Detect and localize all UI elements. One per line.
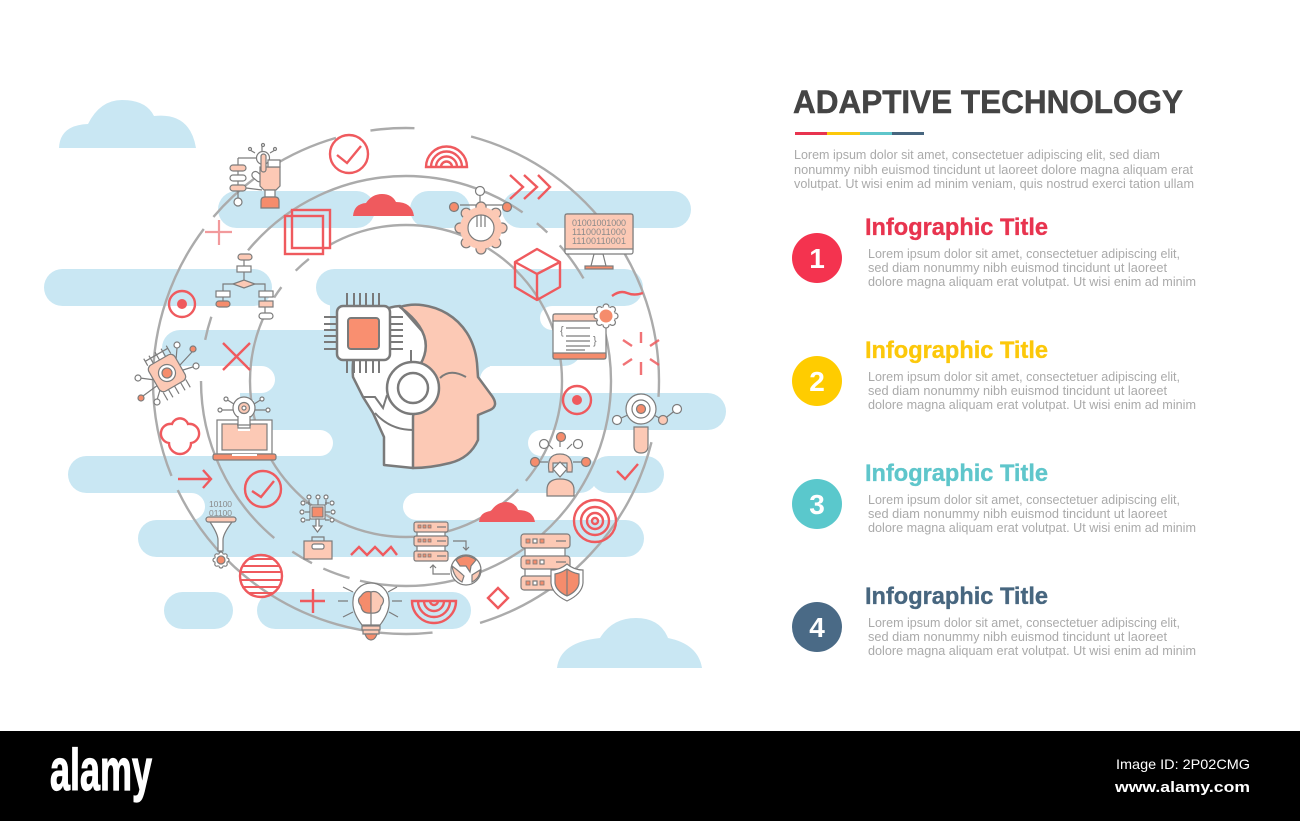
item 3 text	[868, 492, 1196, 535]
icon: code window with gear	[553, 304, 618, 359]
icon: triple chevrons	[510, 175, 550, 199]
item 4 text: dolore magna aliquam erat volutpat. Ut wisi enim ad minim	[868, 643, 1196, 658]
icon: cross	[223, 343, 250, 370]
item 4 text	[868, 615, 1196, 658]
icon: servers with globe	[414, 522, 481, 585]
icon: magnifier with nodes	[612, 394, 682, 453]
icon: overlapping squares	[285, 210, 330, 254]
intro text: Lorem ipsum dolor sit amet, consectetuer adipiscing elit, sed diam	[794, 147, 1160, 162]
icon: inverted rainbow arcs	[412, 601, 456, 623]
badge 1	[792, 233, 842, 283]
item 1 text: Lorem ipsum dolor sit amet, consectetuer adipiscing elit,	[868, 246, 1180, 261]
watermark logo: alamy	[50, 738, 152, 803]
icon: diamond	[488, 588, 508, 608]
icon: binary monitor: 11100110001	[572, 236, 626, 246]
icon: laptop with bulb	[213, 397, 276, 460]
icon: funnel with data: 01100	[209, 508, 232, 518]
concentric dashed rings	[153, 128, 659, 634]
item 1 heading: Infographic Title	[865, 214, 1048, 241]
icon: check circle	[330, 135, 368, 173]
item 1 text	[868, 246, 1196, 289]
badge 4: 4	[809, 612, 825, 643]
icon: arrow	[178, 470, 211, 488]
icon: concentric target	[574, 500, 616, 542]
icon: chip to briefcase	[300, 495, 335, 559]
item 2 text: dolore magna aliquam erat volutpat. Ut wisi enim ad minim	[868, 397, 1196, 412]
footer bar	[0, 731, 1300, 821]
item 4 heading: Infographic Title	[865, 583, 1048, 610]
icon: target right	[563, 386, 591, 414]
icon: red cloud lower	[479, 502, 535, 522]
icon: binary monitor: 11100011000	[572, 227, 626, 237]
icon: plus	[300, 589, 325, 613]
icon: hand pressing button with flow	[230, 144, 280, 208]
item 2	[792, 337, 1196, 412]
icon: small chip rotated	[135, 342, 199, 405]
icon: gear with nodes	[450, 186, 512, 254]
item 1	[792, 214, 1196, 289]
icon: flowchart	[216, 254, 273, 319]
badge 2	[792, 356, 842, 406]
intro text	[794, 147, 1194, 191]
icon: check circle lower	[245, 471, 281, 507]
badge 1: 1	[809, 243, 825, 274]
icon: light bulb with brain	[338, 583, 402, 640]
item 2 text: sed diam nonummy nibh euismod tincidunt ut laoreet	[868, 383, 1167, 398]
icon: clover	[161, 418, 199, 454]
icon: code window with gear: {	[560, 325, 564, 337]
icon: code window with gear: }	[593, 335, 597, 347]
icon: striped circle	[240, 555, 282, 597]
item 4 text: sed diam nonummy nibh euismod tincidunt ut laoreet	[868, 629, 1167, 644]
item 1 text: dolore magna aliquam erat volutpat. Ut wisi enim ad minim	[868, 274, 1196, 289]
intro text: nonummy nibh euismod tincidunt ut laoreet dolore magna aliquam erat	[794, 162, 1193, 177]
item 2 text: Lorem ipsum dolor sit amet, consectetuer adipiscing elit,	[868, 369, 1180, 384]
icon: binary monitor: 01001001000	[572, 218, 626, 228]
icon: binary monitor	[565, 214, 633, 269]
item 2 text	[868, 369, 1196, 412]
icon: check mark	[617, 464, 638, 479]
item 3 heading: Infographic Title	[865, 460, 1048, 487]
intro text: volutpat. Ut wisi enim ad minim veniam, quis nostrud exerci tation ullam	[794, 176, 1194, 191]
item 4	[792, 583, 1196, 658]
image id: Image ID: 2P02CMG	[1116, 756, 1250, 772]
background: pale blue pills and clouds	[44, 100, 740, 668]
item 3 text: sed diam nonummy nibh euismod tincidunt ut laoreet	[868, 506, 1167, 521]
icon: funnel with data: 10100	[209, 499, 232, 509]
item 3 text: dolore magna aliquam erat volutpat. Ut wisi enim ad minim	[868, 520, 1196, 535]
title underline colour bar	[795, 132, 924, 135]
icon: funnel with data	[206, 499, 236, 568]
icon: red cloud top	[353, 194, 414, 216]
badge 2: 2	[809, 366, 825, 397]
badge 3: 3	[809, 489, 825, 520]
badge 4	[792, 602, 842, 652]
item 2 heading: Infographic Title	[865, 337, 1048, 364]
title: ADAPTIVE TECHNOLOGY	[793, 84, 1183, 120]
item 4 text: Lorem ipsum dolor sit amet, consectetuer adipiscing elit,	[868, 615, 1180, 630]
icon: zigzag	[351, 547, 397, 555]
icon: rainbow arcs	[426, 146, 467, 167]
icon: person with options	[530, 432, 590, 496]
badge 3	[792, 479, 842, 529]
central head with chip	[324, 293, 495, 468]
item 3	[792, 460, 1196, 535]
website: www.alamy.com	[1114, 779, 1250, 796]
icon: wave	[612, 292, 643, 296]
microchip	[324, 293, 403, 373]
icon: servers with shield	[521, 534, 583, 601]
item 1 text: sed diam nonummy nibh euismod tincidunt ut laoreet	[868, 260, 1167, 275]
icon: small target left	[169, 291, 195, 317]
icon: pale plus	[205, 220, 232, 245]
item 3 text: Lorem ipsum dolor sit amet, consectetuer adipiscing elit,	[868, 492, 1180, 507]
icon: burst	[623, 332, 659, 375]
icon: cube	[515, 249, 560, 300]
